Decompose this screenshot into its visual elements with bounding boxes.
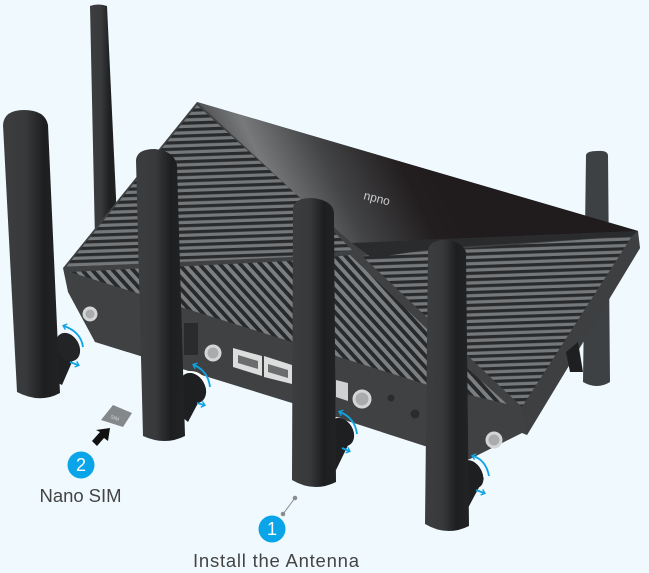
connectors	[84, 308, 501, 447]
insert arrow	[92, 428, 110, 446]
ethernet port right	[336, 380, 348, 401]
side vent panel: diagonal hatch	[70, 255, 428, 385]
arrow antenna 3	[340, 412, 357, 451]
router	[63, 102, 640, 460]
arrow antenna 4	[473, 456, 489, 493]
label: Install the Antenna: Install the Antenna	[193, 550, 360, 571]
side vent panel: left horizontal	[66, 105, 352, 267]
logo on top: npno	[362, 188, 392, 208]
buttons	[388, 394, 420, 418]
antenna 2 with knuckle	[136, 149, 211, 441]
arrow antenna 1	[64, 326, 83, 365]
top glass shadow	[352, 231, 638, 258]
router body	[63, 102, 640, 460]
antenna 1 with knuckle	[3, 110, 85, 398]
side vent panel: right horizontal	[362, 236, 632, 407]
side ports	[184, 323, 198, 355]
callout 2: 2	[76, 455, 86, 475]
nano sim card	[101, 405, 132, 427]
top glass panel	[197, 102, 638, 243]
back right antenna	[583, 151, 610, 386]
leader line	[281, 496, 297, 516]
arrow antenna 2	[194, 365, 210, 405]
antenna 4 with knuckle	[425, 240, 488, 531]
side vent panel: lower diagonal hatch	[428, 333, 507, 404]
back left antenna	[90, 4, 118, 240]
callout 1	[258, 516, 286, 542]
rotation arrows	[64, 326, 489, 493]
nano sim card: SIM	[109, 414, 120, 423]
antenna 3 with knuckle	[292, 198, 359, 487]
ethernet ports	[233, 348, 292, 384]
callout 1: 1	[267, 519, 277, 539]
label: Nano SIM: Nano SIM	[40, 485, 122, 506]
callout 2	[68, 452, 94, 478]
right antenna strut	[566, 342, 583, 372]
right chamfer edge	[522, 237, 640, 435]
